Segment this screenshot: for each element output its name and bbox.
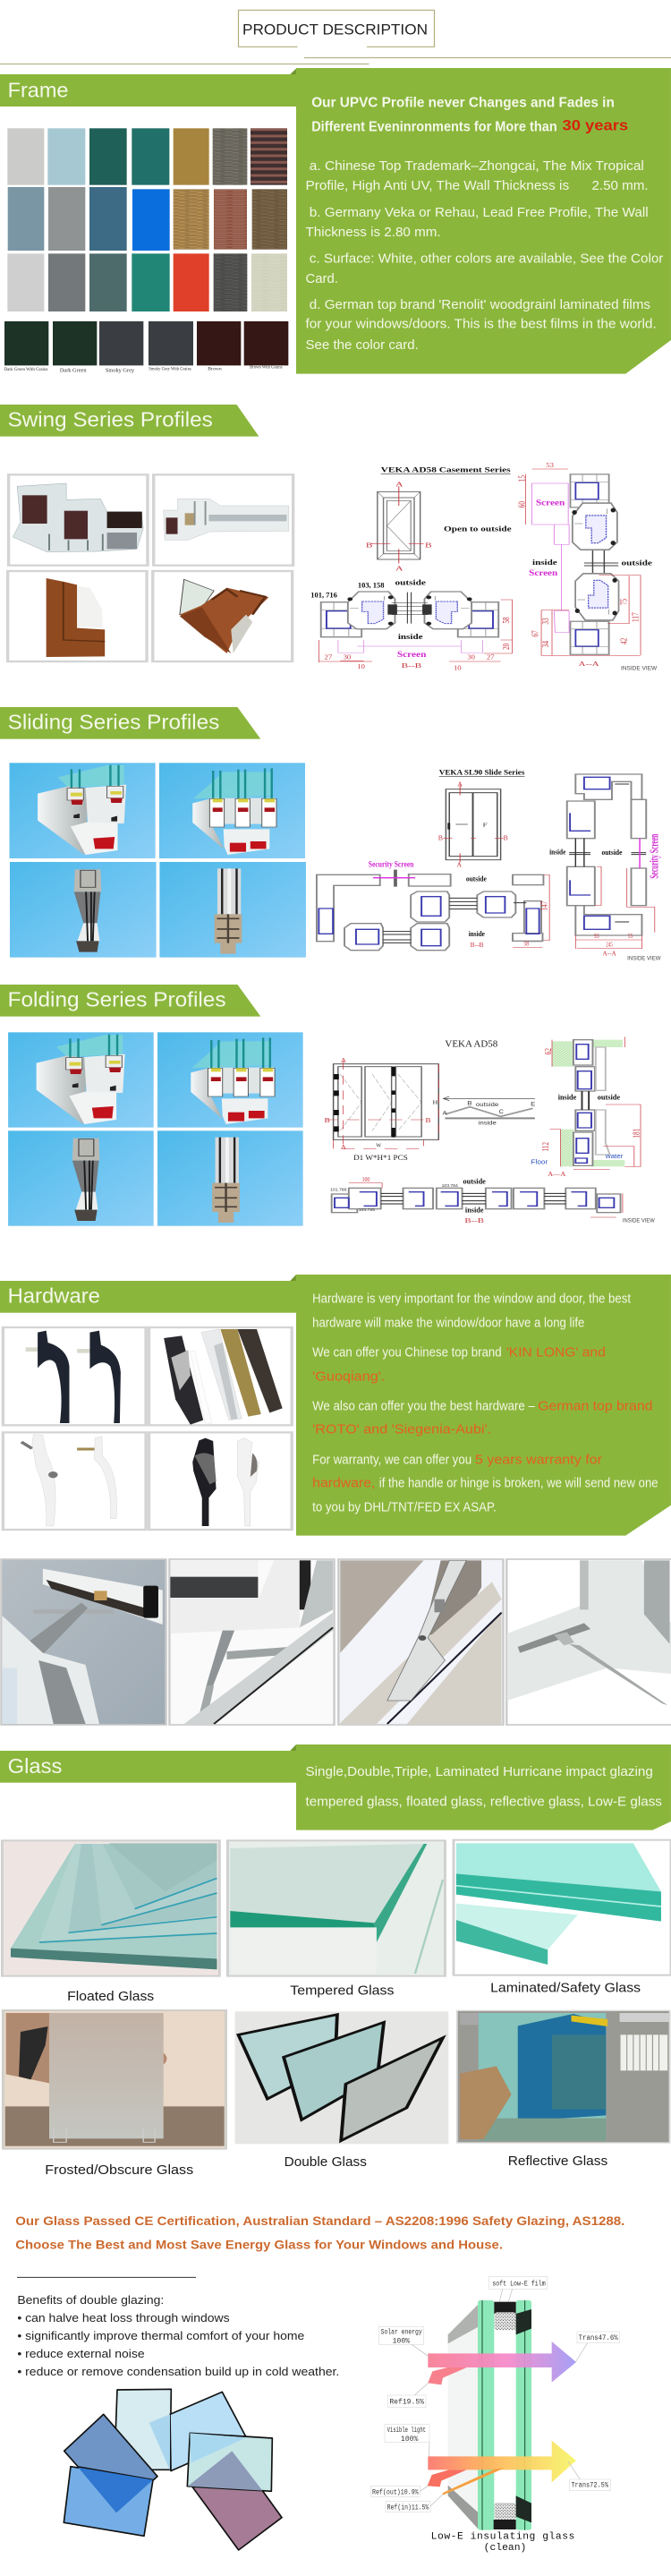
window elevation: A — [341, 1144, 346, 1151]
technical drawing: VEKA SL90 slide: 93 — [594, 933, 599, 940]
heading: swing series banner: Swing Series Profiles — [8, 408, 213, 431]
label: trans 72.5: Trans72.5% — [571, 2481, 608, 2490]
section B-B: Screen — [397, 651, 427, 659]
caption: floated glass: Floated Glass — [67, 1989, 154, 2003]
technical drawing: VEKA SL90 slide: 55 — [628, 933, 633, 940]
caption: Low-E insulating glass: Low-E insulating glass — [431, 2532, 574, 2543]
photo: friction stay, open corner — [506, 1559, 671, 1725]
technical drawing: VEKA SL90 slide: outside — [466, 874, 487, 883]
photo: friction stay, silver frame — [338, 1559, 503, 1725]
panel: hardware — [0, 1275, 671, 1536]
panel: glass — [0, 1744, 671, 2003]
panel: hinge photos — [1, 1559, 671, 1725]
color card swatches: Dark Green With Grains — [4, 368, 47, 372]
folding diagram: A — [443, 1110, 447, 1116]
photo: tempered glass — [227, 1840, 445, 1976]
window elevation: F — [483, 822, 488, 828]
section B-B: 101.786 — [330, 1188, 346, 1192]
section A-A: 15 — [516, 475, 527, 482]
label: trans 72.5 — [570, 2479, 611, 2491]
photo: two-track profile — [10, 763, 156, 858]
section A-A: 34 — [540, 641, 551, 647]
section B-B: B--B — [402, 662, 421, 670]
photo: white lockable handles — [3, 1432, 146, 1530]
benefits list: • reduce or remove condensation build up in cold weather. — [17, 2365, 339, 2378]
section A-A: 67 — [530, 630, 540, 637]
color card swatches: Smoky Grey — [106, 368, 135, 374]
title: product description — [238, 10, 435, 47]
label: visible light: 100% — [401, 2435, 418, 2444]
folding diagram — [443, 1096, 536, 1126]
caption: reflective glass: Reflective Glass — [508, 2154, 607, 2168]
heading: frame banner — [0, 69, 296, 107]
caption: double glass: Double Glass — [285, 2154, 367, 2169]
technical drawing: VEKA AD58 casement: Open to outside — [444, 525, 512, 533]
technical drawing: VEKA SL90 slide: Security Screen — [649, 833, 661, 879]
text panel: hardware description: 'ROTO' and 'Siegenia-Aubi'. — [312, 1422, 491, 1437]
text panel: frame description: Thickness is 2.80 mm. — [306, 225, 441, 239]
section A-A: 62 — [543, 1048, 553, 1054]
heading: hardware banner: Hardware — [8, 1284, 100, 1308]
section B-B: outside — [463, 1177, 486, 1186]
benefits of double glazing and glass panes — [17, 2277, 339, 2550]
photo: black handles — [3, 1327, 146, 1425]
diagram: Low-E insulating glass — [370, 2276, 619, 2554]
section B-B: 30 — [467, 653, 475, 661]
section B-B: 103.784 — [442, 1184, 458, 1189]
window elevation: B — [438, 834, 443, 841]
benefits list: Benefits of double glazing: — [17, 2293, 164, 2307]
benefits list: • reduce external noise — [17, 2347, 145, 2360]
technical drawing: VEKA SL90 slide: 245 — [606, 941, 613, 948]
technical drawing: VEKA AD58 folding — [325, 1036, 655, 1224]
text panel: frame description: 2.50 mm. — [591, 178, 649, 192]
photo: dark and white handles — [149, 1432, 292, 1530]
text panel: hardware description: 'KIN LONG' and — [506, 1345, 606, 1360]
window elevation: H — [433, 1099, 437, 1105]
section B-B: 27 — [487, 653, 495, 661]
section B-B: 10 — [357, 663, 365, 670]
folding diagram: C — [499, 1108, 504, 1115]
heading: folding series banner: Folding Series Profiles — [8, 988, 226, 1011]
text panel: frame description — [296, 68, 671, 374]
section A-A: 117 — [630, 612, 641, 622]
section A-A: 112 — [540, 1142, 551, 1152]
technical drawing: VEKA SL90 slide: outside — [601, 849, 623, 857]
panel: swing series — [0, 405, 657, 671]
certification statement — [15, 2213, 624, 2252]
window elevation: A — [395, 565, 403, 572]
text panel: hardware description: We can offer you Chinese top brand — [312, 1345, 502, 1360]
window elevation — [366, 481, 432, 572]
technical drawing: VEKA SL90 slide: inside — [469, 930, 485, 938]
window elevation: A — [456, 861, 462, 868]
heading: glass banner — [0, 1744, 296, 1783]
technical drawing: VEKA SL90 slide: 147 — [539, 900, 549, 911]
label: soft Low-E film — [489, 2276, 548, 2289]
certification statement: Choose The Best and Most Save Energy Glass for Your Windows and House. — [15, 2238, 503, 2252]
text panel: hardware description: 5 years warranty for — [475, 1453, 602, 1467]
text panel: hardware description: We also can offer you the best hardware – — [312, 1399, 536, 1413]
folding diagram: outside — [476, 1101, 499, 1108]
photo: frosted glass — [3, 2010, 226, 2149]
label: visible light: Visible light — [387, 2426, 426, 2435]
photo: section view beige — [157, 1130, 303, 1226]
window elevation: B — [325, 1117, 330, 1124]
text panel: glass types — [296, 1744, 671, 1830]
benefits list — [17, 2293, 339, 2378]
folding diagram: E — [531, 1101, 536, 1107]
text panel: hardware description: 'Guoqiang'. — [312, 1369, 385, 1384]
caption: frosted obscure glass: Frosted/Obscure Glass — [45, 2162, 193, 2177]
section A-A: A--A — [579, 661, 599, 668]
technical drawing: VEKA AD58 casement — [310, 462, 657, 671]
label: ref out: Ref(out)10.9% — [372, 2487, 419, 2496]
photo: double glass — [235, 2011, 448, 2144]
caption: tempered glass: Tempered Glass — [290, 1983, 395, 1998]
section A-A: 75 — [618, 598, 629, 605]
window elevation: B — [425, 542, 432, 549]
panel: glass types continued — [3, 2010, 670, 2252]
text panel: frame description: See the color card. — [306, 337, 419, 352]
photo: floated glass — [2, 1840, 219, 1976]
window elevation: B — [503, 834, 508, 841]
text panel: hardware description: For warranty, we can offer you — [312, 1453, 471, 1467]
technical drawing: VEKA SL90 slide: VEKA SL90 Slide Series — [439, 768, 524, 777]
heading: sliding series banner: Sliding Series Profiles — [8, 711, 219, 734]
technical drawing: VEKA AD58 casement: VEKA AD58 Casement Series — [381, 465, 511, 474]
technical drawing: VEKA SL90 slide: A--A — [602, 950, 616, 957]
technical drawing: VEKA SL90 slide — [317, 768, 661, 961]
photo: section view dark — [8, 1130, 154, 1226]
label: soft Low-E film: soft Low-E film — [492, 2279, 546, 2288]
color card swatches — [4, 128, 288, 374]
label: ref in — [386, 2501, 430, 2512]
section B-B: 58 — [501, 617, 511, 624]
section A-A: A—A — [548, 1171, 566, 1178]
section B-B: 100 — [362, 1176, 370, 1183]
text panel: frame description: 30 years — [562, 117, 628, 133]
caption: Low-E insulating glass: (clean) — [484, 2543, 526, 2554]
section B-B: 103, 158 — [358, 581, 385, 590]
panel: sliding series — [0, 707, 661, 961]
window elevation — [325, 1057, 438, 1162]
section B-B: inside — [398, 633, 423, 641]
section A-A: Screen — [529, 569, 558, 577]
section B-B: 103.725 — [359, 1208, 375, 1213]
photo: wood grain corner — [8, 571, 147, 661]
photo: friction stay, grey backdrop — [1, 1559, 166, 1725]
color card swatches: Dark Green — [60, 368, 87, 374]
technical drawing: VEKA SL90 slide: B--B — [471, 942, 483, 949]
section B-B: B--B — [464, 1217, 484, 1224]
illustration: tinted glass panes — [64, 2389, 282, 2550]
photo: three-track profile — [159, 763, 305, 858]
photo: multi colour handles — [149, 1327, 292, 1425]
label: ref out — [370, 2486, 420, 2496]
section B-B: 20 — [501, 643, 511, 650]
section A-A: 53 — [546, 462, 554, 469]
color card swatches: Brown With Grains — [250, 366, 283, 371]
text panel: hardware description — [296, 1275, 671, 1536]
section B-B — [310, 578, 513, 671]
section B-B: inside — [465, 1206, 484, 1215]
heading: frame banner: Frame — [8, 79, 69, 102]
panel: frame — [0, 68, 671, 374]
photo: white profile with steel — [154, 474, 293, 566]
text panel: frame description: Card. — [306, 271, 338, 286]
photo: laminated glass — [454, 1840, 671, 1975]
color card swatches: Smoky Grey With Grains — [149, 367, 191, 371]
technical drawing: VEKA AD58 folding: VEKA AD58 — [445, 1038, 498, 1049]
heading: swing series banner — [0, 405, 259, 437]
section A-A — [531, 1036, 641, 1178]
heading: sliding series banner — [0, 707, 260, 739]
window elevation: W — [376, 1142, 381, 1148]
text panel: frame description: Profile, High Anti UV, The Wall Thickness is — [306, 178, 569, 192]
window elevation: D1 W*H*1 PCS — [353, 1155, 408, 1162]
section A-A: 60 — [516, 501, 527, 508]
section A-A: outside — [621, 559, 652, 567]
window elevation: B — [366, 542, 373, 549]
text panel: hardware description: hardware, — [312, 1476, 375, 1490]
section A-A: inside — [532, 559, 557, 567]
section A-A: 42 — [618, 637, 629, 644]
window elevation: A — [395, 481, 403, 488]
label: trans 47.6: Trans47.6% — [579, 2333, 618, 2342]
section B-B — [317, 874, 543, 951]
section B-B: 30 — [344, 653, 352, 661]
window elevation: A — [341, 1057, 346, 1064]
benefits list: • significantly improve thermal comfort of your home — [17, 2329, 304, 2342]
color card swatches: Brown — [208, 367, 222, 372]
photo: section view beige — [159, 862, 306, 958]
technical drawing: VEKA SL90 slide: 58 — [523, 940, 529, 947]
window elevation: B — [425, 1117, 431, 1124]
technical drawing: VEKA SL90 slide: Security Screen — [369, 860, 414, 869]
section B-B: 10 — [454, 664, 462, 671]
technical drawing: VEKA SL90 slide: inside — [549, 848, 565, 857]
section A-A: inside — [558, 1093, 576, 1102]
text panel: hardware description: to you by DHL/TNT/FED EX ASAP. — [312, 1499, 497, 1514]
benefits list: • can halve heat loss through windows — [17, 2311, 230, 2324]
label: ref in: Ref(in)11.5% — [387, 2503, 429, 2512]
section B-B: 101, 716 — [310, 591, 337, 600]
section B-B: outside — [395, 578, 426, 587]
photo: wood grain profile — [153, 571, 293, 661]
photo: section view dark — [10, 862, 157, 958]
window elevation — [438, 780, 508, 868]
section A-A: 181 — [631, 1129, 641, 1139]
heading: glass banner: Glass — [8, 1755, 62, 1778]
caption: Low-E insulating glass — [431, 2532, 574, 2554]
folding diagram: inside — [479, 1120, 497, 1126]
photo: two-track profile — [8, 1032, 154, 1128]
section A-A: Floor — [531, 1158, 548, 1165]
label: solar energy — [378, 2326, 423, 2346]
panel: folding series — [0, 985, 655, 1226]
section A-A: Screen — [536, 499, 565, 508]
section A-A — [516, 462, 657, 671]
folding diagram: B — [467, 1100, 472, 1106]
window elevation: A — [457, 780, 463, 788]
section B-B: INSIDE VIEW — [623, 1217, 655, 1224]
section B-B — [330, 1176, 655, 1224]
title: product description: PRODUCT DESCRIPTION — [242, 21, 428, 38]
label: solar energy: Solar energy — [381, 2328, 422, 2337]
heading: folding series banner — [0, 985, 260, 1017]
section A-A: 33 — [540, 618, 551, 625]
photo: friction stay, white window — [169, 1559, 335, 1725]
glass body — [448, 2300, 531, 2530]
heading: hardware banner — [0, 1275, 296, 1313]
photo: reflective glass — [457, 2010, 670, 2143]
section A-A — [567, 774, 646, 935]
label: visible light — [385, 2425, 429, 2444]
section B-B: 27 — [325, 653, 333, 661]
section A-A: water — [605, 1153, 624, 1160]
photo: three-track profile — [157, 1032, 303, 1128]
label: ref 19.5: Ref19.5% — [389, 2397, 424, 2406]
arrow: visible light transmission — [428, 2441, 576, 2495]
label: solar energy: 100% — [393, 2337, 410, 2346]
photo: white profile with dark core — [9, 474, 148, 566]
section A-A: outside — [598, 1093, 620, 1102]
arrow: solar energy transmission — [428, 2341, 576, 2384]
